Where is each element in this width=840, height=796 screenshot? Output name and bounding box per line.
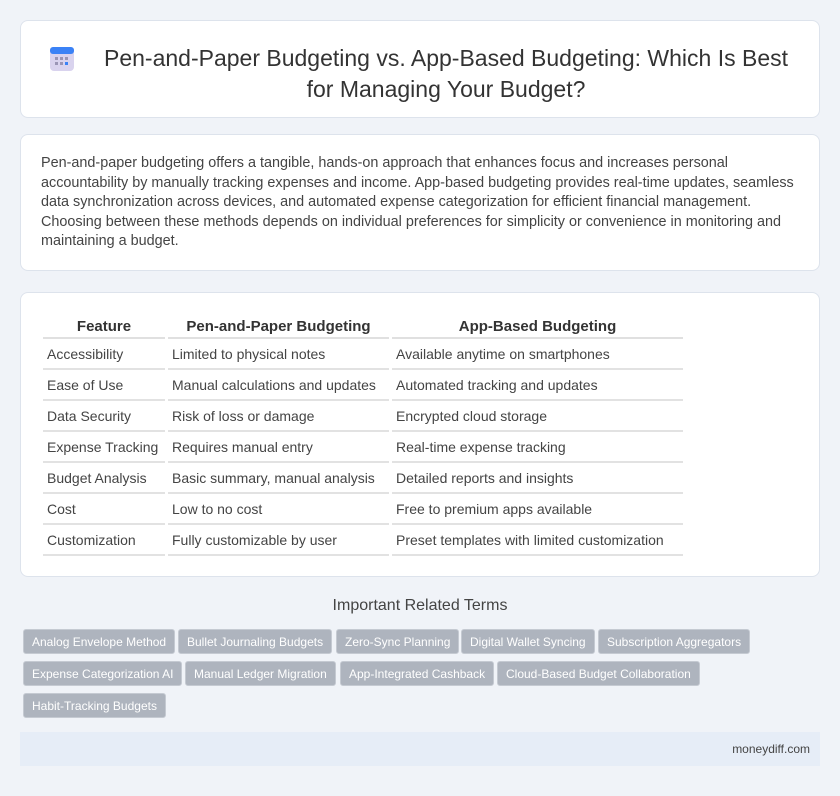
comparison table: [20, 292, 820, 577]
tags: Analog Envelope Method: [32, 635, 166, 649]
comparison table: Ease of Use: [47, 376, 123, 392]
comparison table: Basic summary, manual analysis: [172, 470, 375, 486]
comparison table: Preset templates with limited customization: [396, 532, 664, 548]
comparison table: Detailed reports and insights: [396, 470, 573, 486]
intro text: maintaining a budget.: [41, 233, 179, 249]
comparison table: Cost: [47, 500, 76, 516]
title card: [20, 20, 820, 118]
comparison table: Risk of loss or damage: [172, 408, 314, 424]
tags: Bullet Journaling Budgets: [187, 635, 323, 649]
comparison table: Limited to physical notes: [172, 346, 325, 362]
intro text: data synchronization across devices, and automated expense categorization for efficient financial management.: [41, 194, 751, 210]
tags: Habit-Tracking Budgets: [32, 699, 157, 713]
comparison table: Encrypted cloud storage: [396, 408, 547, 424]
comparison table: Expense Tracking: [47, 438, 158, 454]
comparison table: Accessibility: [47, 346, 123, 362]
comparison table: Low to no cost: [172, 500, 262, 516]
comparison table: Real-time expense tracking: [396, 438, 566, 454]
footer: moneydiff.com: [732, 742, 810, 756]
intro text: [20, 134, 820, 271]
comparison table: Budget Analysis: [47, 470, 147, 486]
comparison table: Pen-and-Paper Budgeting: [186, 318, 371, 334]
comparison table: Automated tracking and updates: [396, 376, 598, 392]
comparison table: Requires manual entry: [172, 438, 313, 454]
title: [104, 45, 788, 102]
icon: calendar: [50, 47, 74, 71]
tags: Subscription Aggregators: [607, 635, 741, 649]
tags: Expense Categorization AI: [32, 667, 173, 681]
title: Pen-and-Paper Budgeting vs. App-Based Budgeting: Which Is Best: [104, 45, 788, 71]
tags: Cloud-Based Budget Collaboration: [506, 667, 691, 681]
comparison table: Customization: [47, 532, 136, 548]
comparison table: Available anytime on smartphones: [396, 346, 610, 362]
footer: [20, 732, 820, 766]
title: for Managing Your Budget?: [307, 76, 585, 102]
tags: Digital Wallet Syncing: [470, 635, 586, 649]
intro text: Pen-and-paper budgeting offers a tangible, hands-on approach that enhances focus and increases personal: [41, 155, 728, 171]
tags: App-Integrated Cashback: [349, 667, 485, 681]
comparison table: Fully customizable by user: [172, 532, 337, 548]
comparison table: Free to premium apps available: [396, 500, 592, 516]
tags: Manual Ledger Migration: [194, 667, 327, 681]
tags: Zero-Sync Planning: [345, 635, 450, 649]
intro text: Choosing between these methods depends on individual preferences for simplicity or convenience in monitoring and: [41, 214, 781, 230]
related terms heading: Important Related Terms: [333, 597, 507, 614]
comparison table: App-Based Budgeting: [459, 318, 616, 334]
comparison table: Feature: [77, 318, 131, 334]
comparison table: Manual calculations and updates: [172, 376, 376, 392]
intro text: accountability by manually tracking expenses and income. App-based budgeting provides real-time updates, seamless: [41, 174, 794, 190]
comparison table: Data Security: [47, 408, 131, 424]
